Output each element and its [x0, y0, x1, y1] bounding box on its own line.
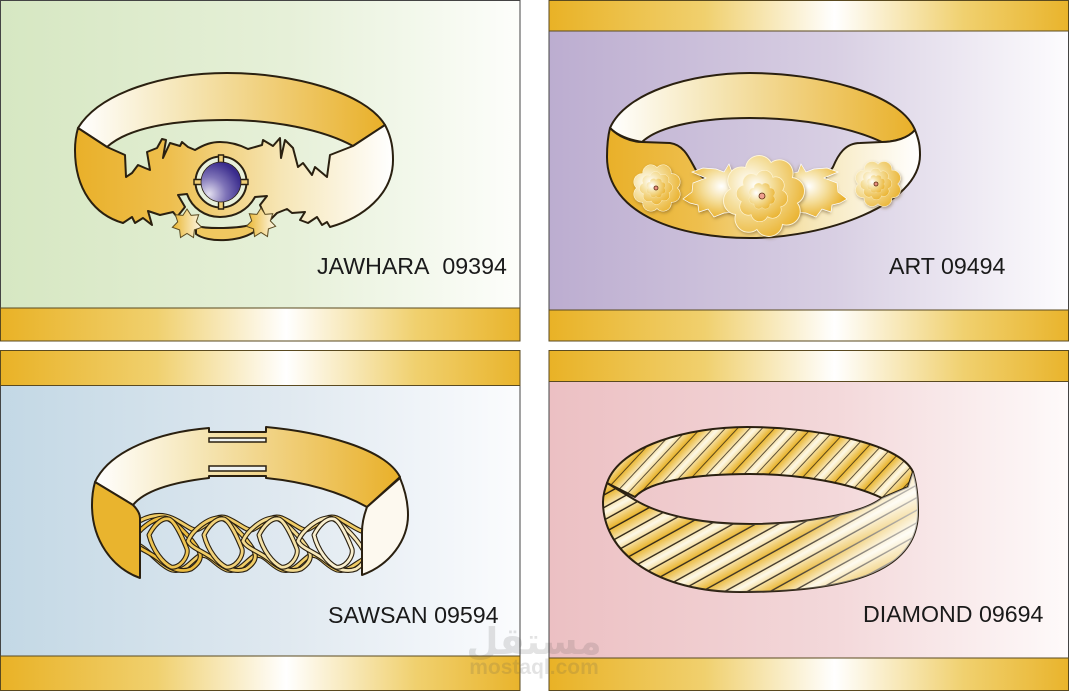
gold bar top: [549, 350, 1068, 382]
label: Sawsan: SAWSAN 09594: [328, 602, 499, 628]
star left: [172, 209, 202, 238]
left front: [92, 482, 140, 578]
panel background: [549, 0, 1068, 340]
pod right: [785, 164, 847, 217]
bracelet: Art: [607, 73, 920, 242]
watermark: [466, 620, 602, 679]
label: Jawhara: JAWHARA 09394: [317, 253, 507, 279]
back band: [607, 427, 913, 498]
lattice centre: [130, 515, 370, 571]
gold bar bottom: [0, 656, 520, 690]
setting gaps: [194, 155, 248, 209]
label: Art: ART 09494: [889, 253, 1006, 279]
gem setting ring: [196, 156, 246, 208]
bracelet front: [607, 128, 920, 238]
star right: [246, 208, 276, 236]
gem: [201, 162, 241, 202]
panel: Sawsan: [0, 350, 520, 690]
bracelet inner band: [95, 427, 400, 507]
panel background: [0, 0, 520, 340]
pod left: [683, 164, 745, 217]
gold bar bottom: [549, 658, 1068, 690]
bracelet: Sawsan: [92, 427, 408, 578]
bracelet front with jagged cut-out: [75, 125, 393, 227]
front band highlight: [603, 472, 918, 592]
flower left: [634, 165, 680, 211]
gold bar bottom: [549, 310, 1068, 341]
gold bar bottom: [0, 308, 520, 341]
label: Diamond: DIAMOND 09694: [863, 601, 1044, 627]
flower right: [855, 161, 901, 207]
front band: [603, 472, 918, 592]
panel: Jawhara: [0, 0, 520, 341]
panel background: [549, 350, 1068, 690]
bracelet inner band: [610, 73, 915, 142]
gold bar top: [549, 0, 1068, 31]
panel background: [0, 350, 520, 690]
bracelet: Jawhara: [75, 73, 393, 240]
panel: Art: [549, 0, 1068, 341]
bracelet: Diamond: [603, 427, 918, 592]
watermark arabic: مستقل: [466, 620, 602, 663]
slots: [209, 438, 266, 471]
watermark latin: mostaql.com: [469, 656, 599, 679]
gold bar top: [0, 350, 520, 386]
panel: Diamond: [549, 350, 1068, 690]
right front: [362, 478, 408, 575]
lower arc band: [196, 224, 254, 240]
bracelet inner band: [78, 73, 385, 147]
flower centre: [718, 150, 810, 242]
